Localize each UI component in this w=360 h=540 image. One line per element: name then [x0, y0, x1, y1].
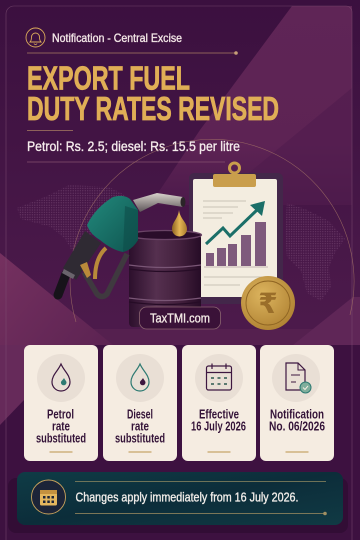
trigger guard — [84, 254, 127, 296]
fuel drop — [172, 210, 187, 237]
trend arrow — [206, 201, 265, 244]
trigger — [95, 248, 106, 279]
icon: calendar badge — [32, 480, 66, 514]
card: diesel: Diesel — [127, 408, 153, 422]
card: diesel: substituted — [115, 432, 165, 446]
card: petrol: substituted — [36, 432, 86, 446]
title: EXPORT FUEL — [27, 60, 190, 96]
hose — [58, 274, 66, 295]
banner: Changes apply immediately from 16 July 2026. — [76, 490, 298, 504]
header: notification tag — [26, 28, 182, 47]
fuel nozzle — [58, 193, 186, 296]
card: diesel: rate — [131, 420, 149, 434]
icon: petrol drop — [52, 364, 70, 391]
card: petrol — [24, 345, 98, 461]
document lines — [203, 201, 262, 285]
card: effective date — [182, 345, 256, 461]
card: effective date: 16 July 2026 — [191, 420, 246, 434]
world map dots — [17, 185, 345, 301]
nozzle body — [87, 196, 138, 252]
card: petrol: Petrol — [47, 408, 74, 422]
subtitle: Petrol: Rs. 2.5; diesel: Rs. 15.5 per litre — [27, 138, 240, 154]
rupee coin: ₹ — [258, 287, 278, 320]
oil barrel — [128, 230, 202, 327]
card: petrol: rate — [52, 420, 70, 434]
card: effective date: Effective — [199, 408, 239, 422]
banner — [8, 472, 348, 533]
title — [27, 60, 279, 127]
card: diesel — [103, 345, 177, 461]
card: notification number — [260, 345, 334, 461]
card: notification number: Notification — [270, 408, 324, 422]
icon: bell — [26, 28, 45, 47]
clipboard — [189, 163, 283, 304]
globe arc — [70, 139, 354, 322]
icon: diesel drop — [131, 364, 149, 391]
icon: document with check — [286, 363, 311, 393]
label: Notification - Central Excise — [52, 31, 182, 45]
rupee coin — [241, 276, 295, 330]
site label: TaxTMI.com — [150, 310, 210, 326]
icon: calendar — [206, 364, 232, 390]
hero illustration — [17, 139, 354, 330]
card: notification number: No. 06/2026 — [269, 420, 325, 434]
bar chart — [204, 222, 268, 267]
spout — [133, 193, 183, 212]
handle — [63, 231, 101, 280]
site label — [140, 307, 220, 329]
